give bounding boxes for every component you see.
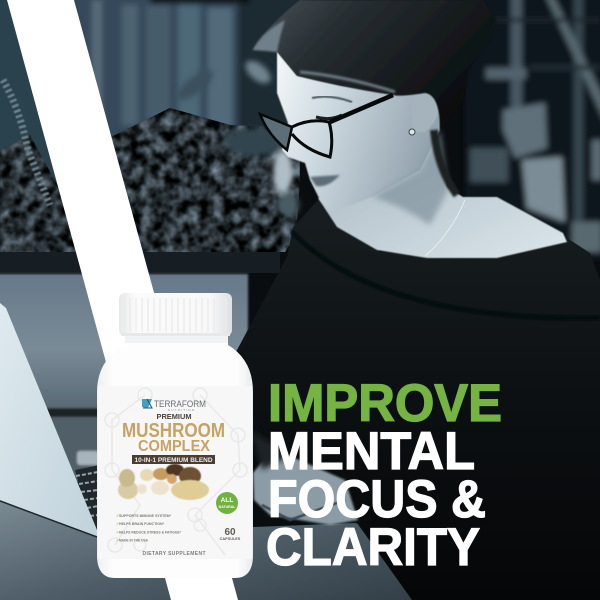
hair <box>252 0 497 130</box>
product bottle <box>97 293 253 578</box>
collar fold <box>292 232 600 318</box>
benefits list: ✓ <box>116 530 119 534</box>
stray hair wisps <box>253 20 285 52</box>
earring <box>409 129 415 135</box>
headline line: clarity: CLARITY <box>266 518 480 577</box>
mushrooms image <box>118 464 209 500</box>
face <box>277 50 442 212</box>
forearm shadow <box>250 430 290 470</box>
headline <box>266 374 502 577</box>
cap <box>119 293 232 336</box>
dietary supplement: DIETARY SUPPLEMENT <box>142 551 206 557</box>
hair at nape <box>434 130 457 195</box>
lips and jaw shadow <box>310 175 340 186</box>
fern fronds <box>3 80 50 205</box>
fingers shadow <box>262 500 345 520</box>
bottle neck shadow <box>125 336 228 343</box>
chest and neck skin <box>318 130 567 258</box>
upper left dark wall <box>0 0 120 252</box>
capsule count <box>220 527 241 541</box>
benefits list: ✓ <box>116 514 119 518</box>
sweater <box>230 198 600 600</box>
hairline highlight <box>300 72 395 92</box>
molecule pattern <box>105 388 247 555</box>
foliage texture <box>0 100 300 255</box>
headline line: improve: IMPROVE <box>268 374 502 433</box>
ear <box>412 92 441 132</box>
hand <box>253 454 358 525</box>
grey panel below ledge <box>0 274 248 482</box>
bottle body <box>97 335 253 578</box>
eyebrow <box>312 97 352 102</box>
table <box>0 490 412 600</box>
laptop <box>0 303 100 537</box>
product name: premium: PREMIUM <box>156 414 192 421</box>
product name: mushroom: MUSHROOM <box>122 420 225 442</box>
white diagonal stripe <box>7 0 238 600</box>
all natural badge: NATURAL <box>219 505 236 509</box>
benefits list: MADE IN THE USA <box>119 538 148 542</box>
benefits list: ✓ <box>116 538 119 542</box>
neck shadow <box>372 130 448 225</box>
brand logo: TERRAFORM <box>154 399 206 409</box>
woman <box>230 0 600 600</box>
product name: complex: COMPLEX <box>138 438 211 455</box>
brand logo <box>142 399 206 412</box>
dark ledge <box>0 252 280 273</box>
blurred plant near face <box>173 56 299 216</box>
all natural badge <box>216 492 238 514</box>
capsule count: CAPSULES <box>220 537 241 541</box>
benefits list <box>116 514 181 542</box>
blend banner: 10-IN-1 PREMIUM BLEND <box>134 457 213 464</box>
brand logo: NUTRITION <box>168 408 194 412</box>
dark right backdrop with stairs <box>465 0 600 260</box>
benefits list: HELPS BRAIN FUNCTION* <box>119 522 164 526</box>
corrugated wall <box>74 0 303 145</box>
headline line: focus: FOCUS & <box>268 470 486 529</box>
necklace <box>425 200 465 256</box>
capsule count: 60 <box>224 527 236 538</box>
headline line: mental: MENTAL <box>268 422 475 481</box>
benefits list: ✓ <box>116 522 119 526</box>
benefits list: SUPPORTS IMMUNE SYSTEM* <box>119 514 171 518</box>
glasses <box>260 95 393 157</box>
all natural badge: ALL <box>221 497 233 504</box>
benefits list: HELPS REDUCE STRESS & FATIGUE* <box>119 530 181 534</box>
label <box>98 386 252 559</box>
closed eyelid <box>316 115 342 119</box>
